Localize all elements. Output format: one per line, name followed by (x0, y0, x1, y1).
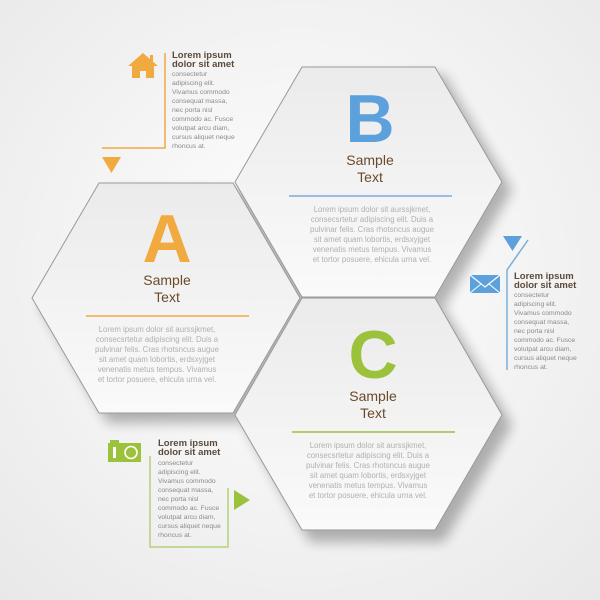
callout: right: Vivamus commodo (514, 310, 572, 317)
callout: top-left: dolor sit amet (172, 59, 235, 70)
letter A: A (142, 201, 192, 277)
callout: top-left: cursus aliquet neque (172, 134, 235, 141)
heading A: Sample (143, 272, 191, 288)
body B: consecsrtetur adipiscing elit. Duis a (311, 215, 434, 224)
body A: sit amet quam lobortis, erdsxyjget (99, 355, 216, 364)
callout: top-left: Lorem ipsum (172, 50, 232, 61)
hexagon B: Text (357, 169, 383, 185)
body A: venenatis metus tempus. Vivamus (98, 365, 216, 374)
callout: top-left: commodo ac. Fusce (172, 116, 233, 123)
callout: right: cursus aliquet neque (514, 355, 577, 362)
callout: top-left: rhoncus at. (172, 143, 206, 150)
body C: sit amet quam lobortis, erdsxyjget (310, 471, 427, 480)
hexagon C: Text (360, 405, 386, 421)
letter C: C (348, 317, 398, 393)
callout: right: nec porta nisl (514, 328, 555, 335)
heading B: Sample (346, 152, 394, 168)
callout: top-left (102, 50, 235, 173)
callout: right: consectetur (514, 292, 550, 299)
callout: top-left: volutpat arcu diam, (172, 125, 230, 132)
arrow down orange (102, 157, 121, 173)
callout: right: volutpat arcu diam, (514, 346, 572, 353)
letter B: B (345, 81, 395, 157)
callout: bottom-left: consectetur (158, 460, 194, 467)
body B: venenatis metus tempus. Vivamus (313, 245, 431, 254)
callout: right: rhoncus at. (514, 364, 548, 371)
callout: top-left: consequat massa, (172, 98, 227, 105)
callout: bottom-left: adipiscing elit. (158, 469, 201, 476)
callout: bottom-left: volutpat arcu diam, (158, 514, 216, 521)
body A: Lorem ipsum dolor sit aurssjkmet, (99, 325, 215, 334)
arrow down blue (503, 236, 522, 251)
hexagon C (235, 298, 502, 530)
callout: top-left: consectetur (172, 71, 208, 78)
callout: right: consequat massa, (514, 319, 569, 326)
body B (310, 205, 434, 264)
body A: pulvinar felis. Cras rhotsncus augue (95, 345, 219, 354)
callout: bottom-left: cursus aliquet neque (158, 523, 221, 530)
hexagon A (32, 183, 300, 413)
icon: camera (108, 440, 141, 462)
callout: bottom-left (108, 438, 250, 547)
callout: bottom-left: consequat massa, (158, 487, 213, 494)
callout: bottom-left: rhoncus at. (158, 532, 192, 539)
callout: bottom-left: dolor sit amet (158, 447, 221, 458)
callout: top-left: Vivamus commodo (172, 89, 230, 96)
callout: right: dolor sit amet (514, 280, 577, 291)
body C: consecsrtetur adipiscing elit. Duis a (307, 451, 430, 460)
heading C: Sample (349, 388, 397, 404)
body B: pulvinar felis. Cras rhotsncus augue (310, 225, 434, 234)
callout: right: Lorem ipsum (514, 271, 574, 282)
shadows (40, 75, 512, 542)
body B: sit amet quam lobortis, erdsxyjget (314, 235, 431, 244)
body B: Lorem ipsum dolor sit aurssjkmet, (314, 205, 430, 214)
body A: consecsrtetur adipiscing elit. Duis a (96, 335, 219, 344)
callout: top-left: nec porta nisl (172, 107, 213, 114)
callout: bottom-left: nec porta nisl (158, 496, 199, 503)
callout: bottom-left: Lorem ipsum (158, 438, 218, 449)
callout: bottom-left: Vivamus commodo (158, 478, 216, 485)
callout: top-left: adipiscing elit. (172, 80, 215, 87)
callout: right: adipiscing elit. (514, 301, 557, 308)
body C: pulvinar felis. Cras rhotsncus augue (306, 461, 430, 470)
body C: Lorem ipsum dolor sit aurssjkmet, (310, 441, 426, 450)
callout: right: commodo ac. Fusce (514, 337, 575, 344)
body A (95, 325, 219, 384)
body C: venenatis metus tempus. Vivamus (309, 481, 427, 490)
callout: bottom-left: commodo ac. Fusce (158, 505, 219, 512)
callout: right (470, 236, 577, 371)
hexagon A: Text (154, 289, 180, 305)
icon: house (128, 53, 158, 78)
body B: et tortor posuere, ehicula urna vel. (313, 255, 431, 264)
body A: et tortor posuere, ehicula urna vel. (98, 375, 216, 384)
body C (306, 441, 430, 500)
arrow right green (234, 490, 250, 510)
icon: envelope (470, 275, 500, 293)
body C: et tortor posuere, ehicula urna vel. (309, 491, 427, 500)
hexagon B (235, 67, 502, 297)
